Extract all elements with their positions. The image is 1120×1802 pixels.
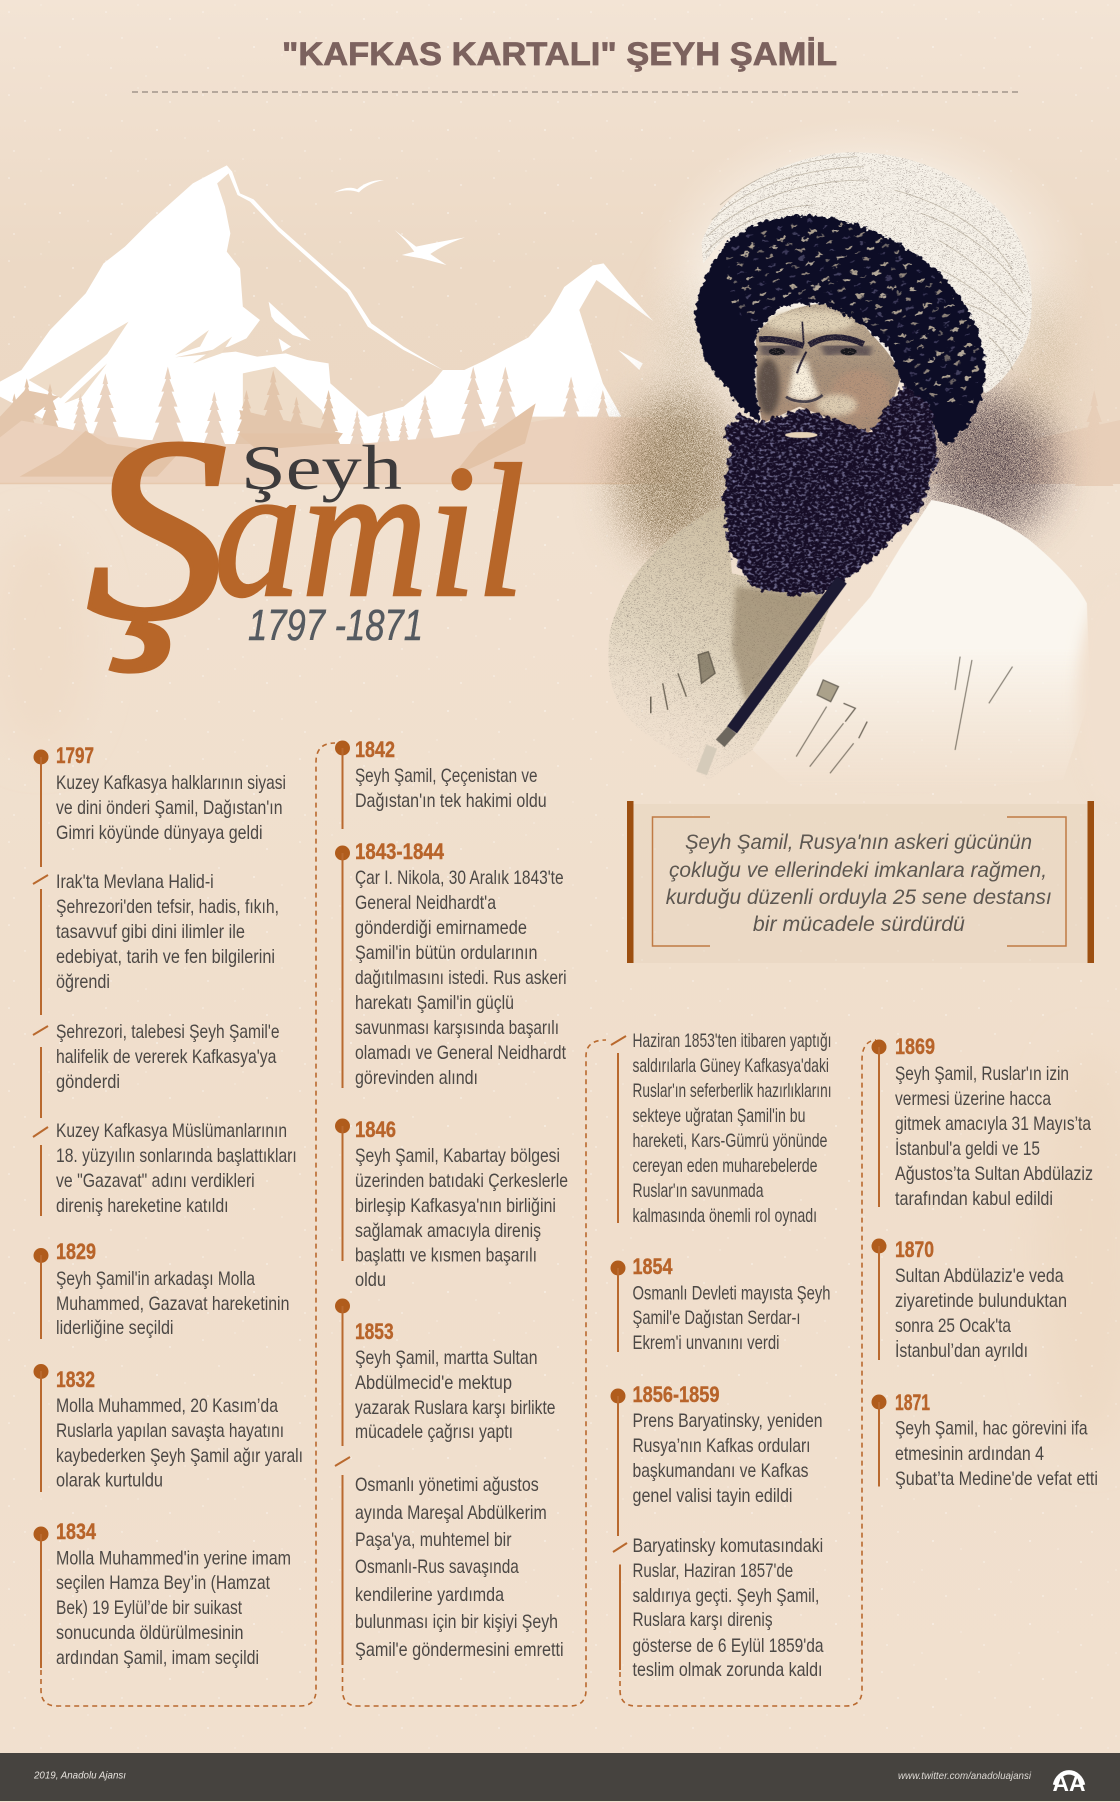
robe edge fade [1077,583,1120,810]
timeline note: Baryatinsky: Ruslar, Haziran 1857'de [632,1560,793,1582]
timeline entry 1854: Ekrem'i unvanını verdi [632,1332,780,1354]
timeline entry 1854: Şamil'e Dağıstan Serdar-ı [632,1307,800,1329]
timeline note: Şehrezori [33,1021,280,1118]
timeline entry 1829: liderliğine seçildi [56,1317,174,1339]
shaded background base [627,403,1050,550]
timeline entry 1842: Şeyh Şamil, Çeçenistan ve [355,765,538,787]
timeline entry 1854 [610,1254,830,1354]
timeline entry 1871: etmesinin ardından 4 [895,1443,1044,1465]
timeline entry 1870: Sultan Abdülaziz'e veda [895,1265,1064,1287]
ground hills [20,403,536,477]
timeline entry 1797: ve dini önderi Şamil, Dağıstan'ın [56,797,282,819]
timeline entry 1853: 1853 [355,1319,394,1344]
timeline entry 1869 [872,1034,1093,1210]
timeline entry 1869: tarafından kabul edildi [895,1188,1053,1210]
timeline connector: column 3 to 4 [620,1040,876,1706]
icon: Anadolu Ajansı logo: AA [1052,1770,1086,1796]
timeline entry 1834: seçilen Hamza Bey’in (Hamzat [56,1572,270,1594]
timeline entry 1843-1844: gönderdiği emirnamede [355,917,527,939]
timeline note: Osmanlı yönetimi: Osmanlı-Rus savaşında [355,1556,519,1578]
halo [644,117,1090,430]
timeline entry 1871: 1871 [895,1390,930,1415]
turban [702,152,1032,393]
timeline entry 1846: üzerinden batıdaki Çerkeslerle [355,1170,568,1192]
timeline note: Osmanlı yönetimi: Paşa'ya, muhtemel bir [355,1529,512,1551]
timeline entry 1846: başlattı ve kısmen başarılı [355,1244,537,1266]
timeline entry 1870: ziyaretinde bulunduktan [895,1290,1067,1312]
footer social link: www.twitter.com/anadoluajansi [898,1770,1032,1782]
timeline entry 1832: Molla Muhammed, 20 Kasım’da [56,1395,278,1417]
timeline note: Baryatinsky: saldırıya geçti. Şeyh Şamil, [632,1585,819,1607]
timeline entry 1846 [335,1117,568,1291]
timeline entry 1856-1859: 1856-1859 [632,1382,720,1407]
timeline entry 1846: birleşip Kafkasya'nın birliğini [355,1195,556,1217]
timeline note: Baryatinsky [613,1535,824,1681]
mountain snow [0,165,654,450]
timeline note: Gazavat: direniş hareketine katıldı [56,1195,229,1217]
forest ground band [0,417,679,483]
timeline entry 1853: yazarak Ruslara karşı birlikte [355,1397,556,1419]
fur hat [695,215,985,447]
timeline entry 1842: Dağıstan'ın tek hakimi oldu [355,790,547,812]
timeline note: Osmanlı yönetimi: Şamil'e göndermesini emretti [355,1639,564,1661]
face [756,303,901,433]
portrait of Şeyh Şamil [608,117,1120,810]
timeline entry 1843-1844: görevinden alındı [355,1067,478,1089]
illustration: mountains, forest and birds [0,165,679,483]
timeline entry 1829: Şeyh Şamil'in arkadaşı Molla [56,1268,255,1290]
timeline note: Gazavat: ve "Gazavat" adını verdikleri [56,1170,255,1192]
timeline note: Haziran 1853 [611,1030,832,1227]
timeline note: Irak: Şehrezori'den tefsir, hadis, fıkıh, [56,896,279,918]
timeline connector: column 1 to 2 [41,743,335,1706]
timeline entry 1846: Şeyh Şamil, Kabartay bölgesi [355,1145,560,1167]
timeline entry 1870: İstanbul’dan ayrıldı [895,1339,1028,1362]
timeline entry 1832: Ruslarla yapılan savaşta hayatını [56,1420,284,1442]
timeline entry 1846: 1846 [355,1117,396,1142]
timeline note: Irak: tasavvuf gibi dini ilimler ile [56,921,245,943]
timeline entry 1829: Muhammed, Gazavat hareketinin [56,1293,289,1315]
timeline note: Şehrezori: halifelik de vererek Kafkasya'ya [56,1046,277,1068]
timeline entry 1854: Osmanlı Devleti mayısta Şeyh [632,1282,830,1304]
quote text: Şeyh Şamil, Rusya'nın askeri gücünün [685,830,1032,854]
timeline entry 1854: 1854 [632,1254,673,1279]
forest trees [72,367,615,447]
timeline note: Irak: Irak'ta Mevlana Halid-i [56,871,214,893]
shoulder strap [702,580,842,773]
timeline entry 1846: oldu [355,1269,386,1291]
timeline note: Haziran 1853: kalmasında önemli rol oynadı [632,1205,817,1227]
timeline entry 1843-1844: olamadı ve General Neidhardt [355,1042,566,1064]
robe: right shoulder [752,500,1090,797]
timeline note: Haziran 1853: Haziran 1853'ten itibaren yaptığı [632,1030,832,1052]
timeline entry 1797 [34,743,286,867]
timeline note: Irak [33,871,279,1015]
timeline entry 1856-1859: genel valisi tayin edildi [632,1485,792,1507]
timeline entry 1834: sonucunda öldürülmesinin [56,1622,244,1644]
timeline note: Baryatinsky: Baryatinsky komutasındaki [632,1535,823,1557]
timeline entry 1842: 1842 [355,737,395,762]
timeline entry 1856-1859 [610,1382,822,1536]
timeline entry 1834: ardından Şamil, imam seçildi [56,1647,259,1669]
timeline entry 1856-1859: Prens Baryatinsky, yeniden [632,1410,822,1432]
timeline connector: column 2 to 3 [342,1040,606,1706]
timeline note: Baryatinsky: teslim olmak zorunda kaldı [632,1659,822,1681]
quote text: kurduğu düzenli orduyla 25 sene destansı [666,885,1052,909]
timeline entry 1829 [34,1239,289,1339]
life dates: 1797 -1871 [248,601,423,650]
timeline note: Irak: öğrendi [56,971,110,993]
timeline note: Haziran 1853: saldırılarla Güney Kafkasya'daki [632,1055,829,1077]
timeline note: Gazavat: 18. yüzyılın sonlarında başlattıkları [56,1145,297,1167]
timeline entry 1829: 1829 [56,1239,96,1264]
timeline entry 1871 [872,1390,1098,1490]
timeline entry 1853 [335,1298,556,1446]
title: "KAFKAS KARTALI" ŞEYH ŞAMİL [282,36,837,72]
beard [724,383,938,597]
timeline entry 1856-1859: Rusya’nın Kafkas orduları [632,1435,810,1457]
timeline entry 1843-1844: General Neidhardt'a [355,892,496,914]
timeline entry 1843-1844 [335,839,567,1089]
timeline entry 1834: Molla Muhammed'in yerine imam [56,1548,291,1570]
footer credit: 2019, Anadolu Ajansı [33,1770,126,1782]
timeline entry 1869: 1869 [895,1034,935,1059]
right side forest [1030,390,1120,486]
timeline note: Gazavat: Kuzey Kafkasya Müslümanlarının [56,1120,287,1142]
timeline entry 1843-1844: Şamil'in bütün ordularının [355,942,538,964]
timeline entry 1832: olarak kurtuldu [56,1470,163,1492]
eyes [769,348,857,355]
bird large [395,230,465,265]
timeline entry 1870 [872,1237,1067,1362]
timeline note: Osmanlı yönetimi: ayında Mareşal Abdülkerim [355,1502,547,1524]
timeline entry 1834 [34,1519,291,1669]
timeline entry 1853: Şeyh Şamil, martta Sultan [355,1347,538,1369]
timeline note: Haziran 1853: hareketi, Kars-Gümrü yönünde [632,1130,828,1152]
robe folds [796,657,1012,773]
timeline note: Osmanlı yönetimi: kendilerine yardımda [355,1584,504,1606]
timeline entry 1856-1859: başkumandanı ve Kafkas [632,1460,809,1482]
timeline entry 1870: sonra 25 Ocak'ta [895,1315,1011,1337]
timeline entry 1832: 1832 [56,1367,95,1392]
timeline entry 1797: Gimri köyünde dünyaya geldi [56,822,263,844]
quote text [666,830,1052,936]
quote text: çokluğu ve ellerindeki imkanlara rağmen, [669,858,1047,882]
timeline note: Osmanlı yönetimi: bulunması için bir kişiyi Şeyh [355,1611,558,1633]
bird small [334,180,384,193]
timeline entry 1853: mücadele çağrısı yaptı [355,1421,513,1443]
timeline entry 1842 [335,737,547,829]
timeline note: Şehrezori: gönderdi [56,1071,120,1093]
footer bar [0,1753,1120,1801]
timeline entry 1834: Bek) 19 Eylül’de bir suikast [56,1597,242,1619]
timeline note: Gazavat [33,1120,297,1217]
portrait fade over mountains [655,250,795,550]
timeline note: Baryatinsky: Ruslara karşı direniş [632,1609,773,1631]
shaded background spray [617,290,1060,560]
timeline entry 1870: 1870 [895,1237,934,1262]
timeline note: Osmanlı yönetimi [335,1457,564,1665]
heading: Şamil: Ş [86,384,228,674]
cartridge pockets [651,652,867,738]
timeline entry 1843-1844: Çar I. Nikola, 30 Aralık 1843'te [355,867,564,889]
mountain shadow streaks [29,322,336,443]
lips [785,432,817,438]
timeline entry 1853: Abdülmecid'e mektup [355,1372,512,1394]
timeline entry 1832 [34,1364,303,1492]
timeline note: Osmanlı yönetimi: Osmanlı yönetimi ağustos [355,1474,539,1496]
heading: Şamil [86,384,525,674]
timeline entry 1797: Kuzey Kafkasya halklarının siyasi [56,772,286,794]
quote panel [627,801,1094,963]
timeline entry 1843-1844: savunması karşısında başarılı [355,1017,559,1039]
timeline note: Haziran 1853: Ruslar'ın savunmada [632,1180,764,1202]
timeline entry 1843-1844: 1843-1844 [355,839,445,864]
timeline entry 1797: 1797 [56,743,94,768]
heading: Şamil: amil [214,427,525,637]
timeline note: Irak: edebiyat, tarih ve fen bilgilerini [56,946,275,968]
quote text: bir mücadele sürdürdü [753,912,965,936]
chest shading [732,587,833,703]
timeline entry 1834: 1834 [56,1519,97,1544]
timeline note: Haziran 1853: Ruslar'ın seferberlik hazırlıklarını [632,1080,832,1102]
timeline entry 1846: sağlamak amacıyla direniş [355,1220,541,1242]
timeline entry 1869: İstanbul'a geldi ve 15 [895,1137,1040,1160]
timeline entry 1869: vermesi üzerine hacca [895,1088,1051,1110]
timeline note: Haziran 1853: cereyan eden muharebelerde [632,1155,818,1177]
timeline note: Baryatinsky: gösterse de 6 Eylül 1859'da [632,1635,824,1657]
robe: left shoulder [608,503,833,780]
timeline entry 1843-1844: harekatı Şamil'in güçlü [355,992,514,1014]
timeline entry 1832: kaybederken Şeyh Şamil ağır yaralı [56,1445,303,1467]
timeline entry 1869: Şeyh Şamil, Ruslar'ın izin [895,1063,1069,1085]
timeline entry 1843-1844: dağıtılmasını istedi. Rus askeri [355,967,567,989]
timeline note: Haziran 1853: sekteye uğratan Şamil'in bu [632,1105,806,1127]
heading: Şeyh: Şeyh [241,432,402,503]
snow patches on shaded face [269,302,643,370]
timeline note: Şehrezori: Şehrezori, talebesi Şeyh Şamil'e [56,1021,280,1043]
